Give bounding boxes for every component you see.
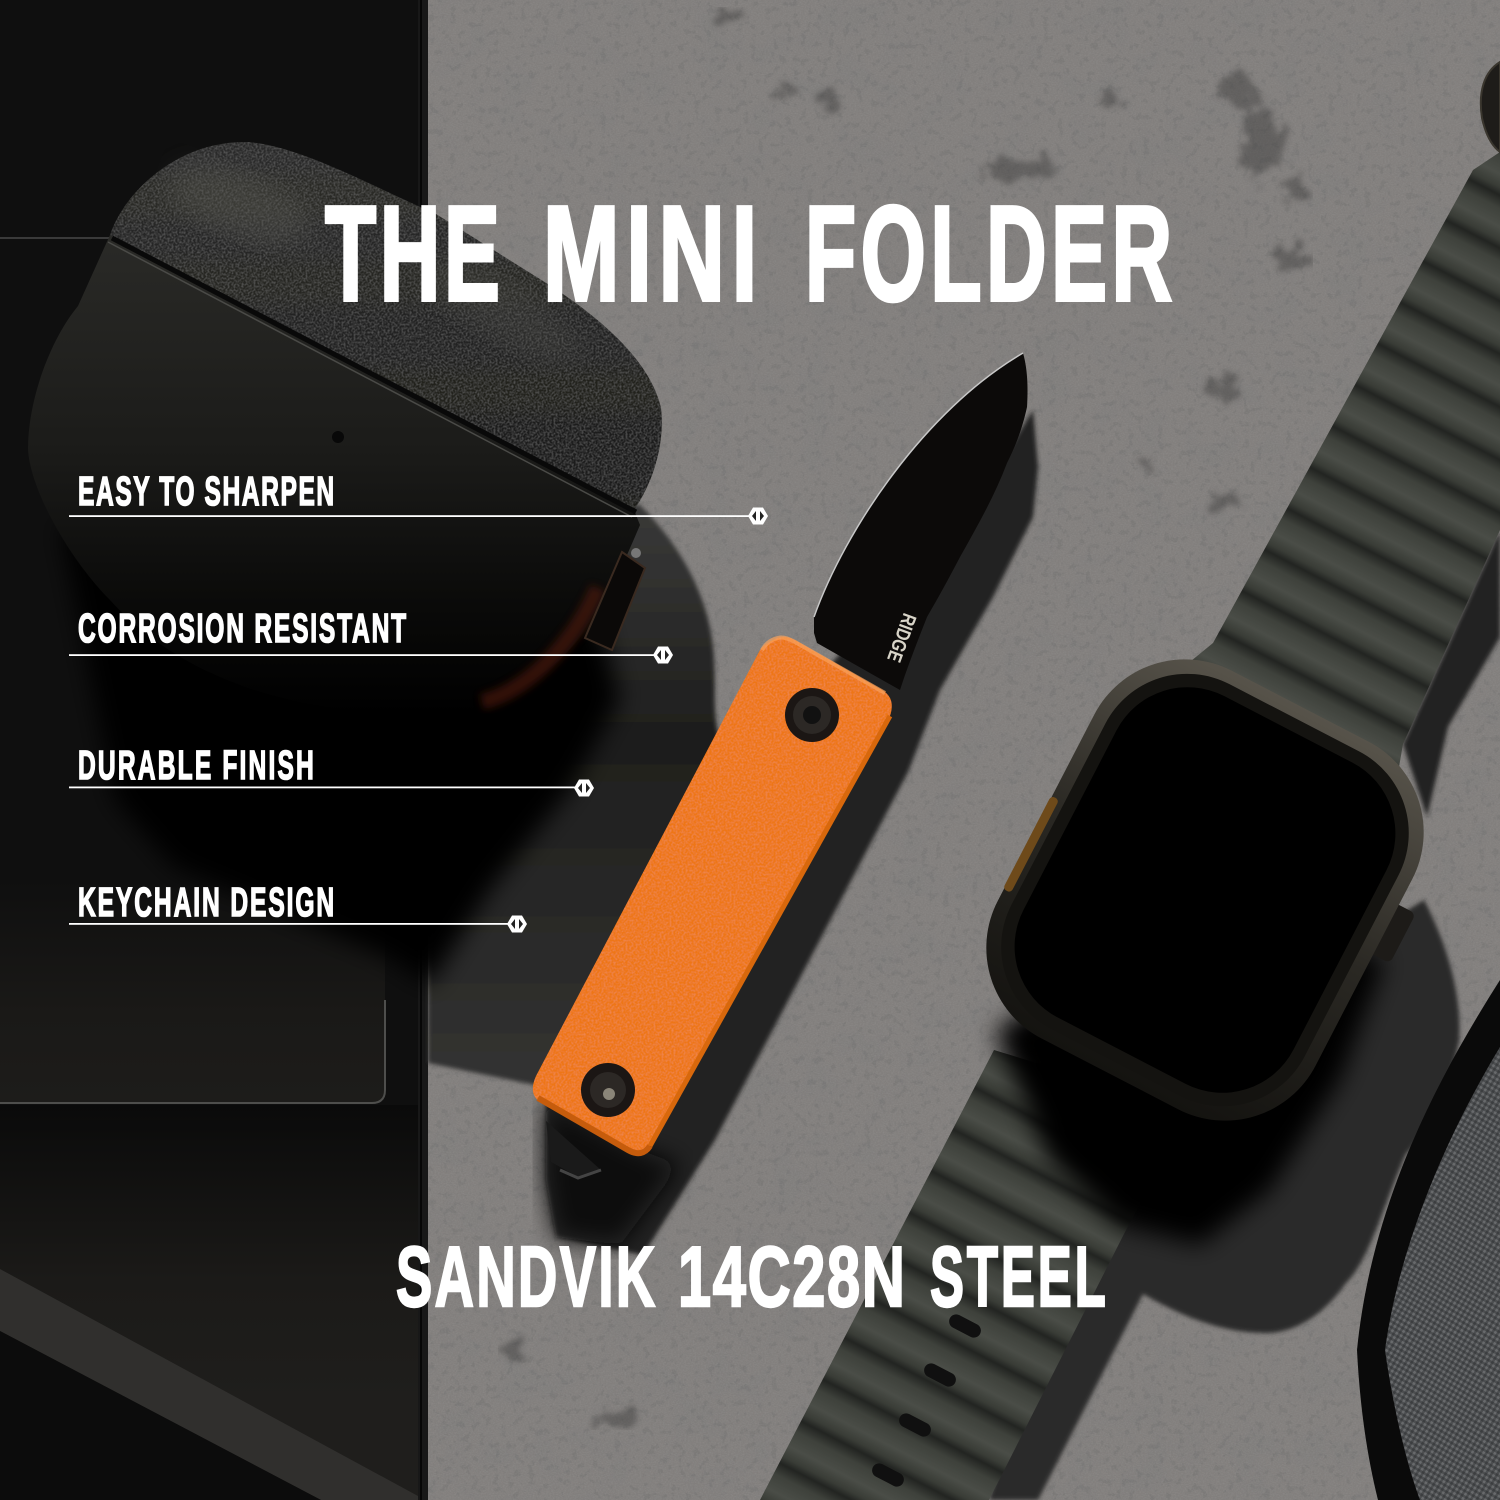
- shadow: black falloff below case: [60, 525, 620, 985]
- case clasp: [585, 548, 645, 650]
- title: MINI: [543, 180, 757, 329]
- diagonal strip: [0, 1269, 418, 1500]
- case body: [28, 235, 640, 715]
- callout: corrosion resistant: CORROSION RESISTANT: [78, 606, 406, 652]
- title: [325, 177, 1172, 329]
- shadow: earbud case on concrete: [428, 505, 720, 1086]
- shadow: knife on concrete: [546, 410, 1038, 1255]
- subtitle: steel type: [396, 1230, 1106, 1325]
- shadow: lanyard dark: [546, 1100, 680, 1245]
- icon: dark object top right: [1481, 62, 1500, 152]
- watch band lower: [760, 1050, 1190, 1500]
- watch crown: [1365, 901, 1416, 963]
- watch case: [951, 624, 1459, 1156]
- callout: keychain design: KEYCHAIN DESIGN: [78, 880, 334, 926]
- panel: dark left surface: [0, 0, 428, 1500]
- title: FOLDER: [805, 177, 1172, 329]
- callout: durable finish: DURABLE FINISH: [78, 743, 314, 789]
- callout: easy to sharpen: EASY TO SHARPEN: [78, 469, 334, 515]
- callout: keychain design: [69, 880, 527, 932]
- raised rectangle: [0, 880, 385, 1103]
- callout: easy to sharpen: [69, 469, 768, 524]
- callout: corrosion resistant: [69, 606, 673, 664]
- watch band upper: [1180, 152, 1500, 790]
- subtitle: steel type: 14C28N: [678, 1230, 905, 1325]
- handle screw top: [785, 688, 839, 742]
- action button: [1003, 796, 1059, 893]
- knife handle: [533, 637, 892, 1155]
- blade logo: RIDGE: [882, 610, 920, 665]
- callout: durable finish: [69, 743, 594, 796]
- shadow: watch on concrete: [989, 900, 1459, 1500]
- icon: fabric speaker: [1357, 980, 1500, 1500]
- icon: leather earbud case: [28, 142, 662, 715]
- knife blade: [814, 353, 1028, 690]
- case lid: [110, 142, 662, 510]
- subtitle: steel type: SANDVIK: [396, 1230, 655, 1325]
- subtitle: steel type: STEEL: [930, 1230, 1106, 1324]
- lanyard tip: [546, 1121, 601, 1178]
- handle screw bottom: [581, 1063, 635, 1117]
- icon: watch: [950, 623, 1476, 1165]
- watch screen: [987, 659, 1423, 1121]
- lower tablet area: [0, 1105, 418, 1500]
- shadow: black under watch: [995, 900, 1385, 1245]
- shadow: upper band: [1403, 530, 1500, 817]
- icon: knife: [533, 353, 1028, 1178]
- band lug holes: [870, 1312, 983, 1489]
- title: THE: [325, 177, 500, 329]
